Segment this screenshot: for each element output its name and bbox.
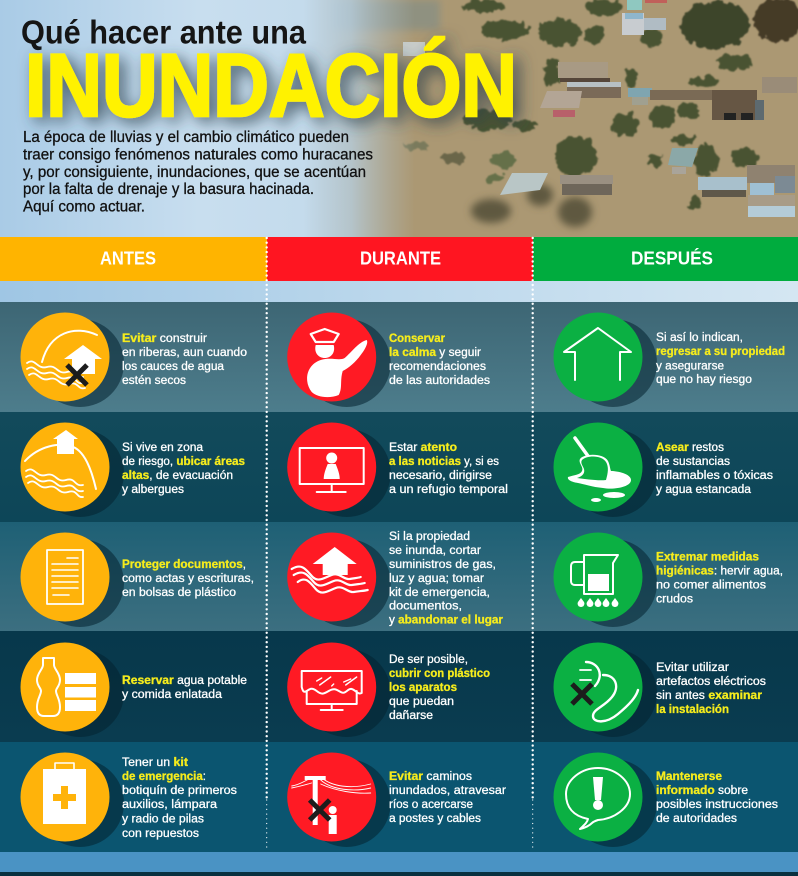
text: regresar a su propiedad: regresar a su propiedad [656, 344, 785, 358]
text: evitar caminos: ríos o acercarse [389, 797, 473, 811]
text: asear restos: de sustancias [656, 454, 730, 468]
text: evitar caminos: a postes y cables [389, 811, 481, 825]
text: asear restos [656, 440, 773, 496]
text: kit de emergencia: y radio de pilas [122, 812, 204, 826]
icon: water jug with drops [554, 532, 657, 627]
title line 2: INUNDACIÓN [25, 35, 517, 135]
text: mantenerse informado: informado sobre [656, 783, 748, 797]
text: ubicar áreas altas [122, 440, 245, 496]
text: evitar artefactos eléctricos: Evitar utilizar [656, 660, 729, 674]
text: mantenerse informado: de autoridades [656, 811, 737, 825]
text: si la propiedad se inunda [389, 529, 503, 626]
text: ubicar áreas altas: altas, de evacuación [122, 468, 233, 482]
panel: después [554, 312, 785, 847]
text: si la propiedad se inunda: se inunda, cortar [389, 543, 481, 557]
text: regresar a su propiedad: Si así lo indican, [656, 330, 743, 344]
text: evitar artefactos eléctricos: sin antes examinar [656, 688, 762, 702]
icon: house outline [554, 312, 657, 407]
text: regresar a su propiedad: y asegurarse [656, 358, 724, 372]
text: mantenerse informado: posibles instrucciones [656, 797, 778, 811]
text: si la propiedad se inunda: suministros de gas, [389, 557, 496, 571]
text: cubrir con plástico: De ser posible, [389, 652, 468, 666]
text: atento a las noticias: necesario, dirigirse [389, 468, 492, 482]
title [21, 14, 517, 135]
text: regresar a su propiedad [656, 330, 785, 386]
text: conservar la calma [389, 331, 490, 387]
text: cubrir con plástico: los aparatos [389, 680, 457, 694]
text: evitar artefactos eléctricos [656, 660, 766, 716]
text: kit de emergencia: con repuestos [122, 826, 199, 840]
icon: document [20, 532, 124, 627]
text: conservar la calma: de las autoridades [389, 373, 490, 387]
icon: police officer [287, 312, 391, 407]
intro paragraph: traer consigo fenómenos naturales como huracanes [23, 146, 373, 164]
icon: house by river crossed [20, 312, 124, 407]
text: kit de emergencia: de emergencia: [122, 769, 206, 783]
icon: power pole crossed [287, 752, 391, 847]
intro paragraph: por la falta de drenaje y la basura hacinada. [23, 181, 314, 198]
text: atento a las noticias: a las noticias y, si es [389, 454, 499, 468]
row background bands [0, 281, 798, 876]
icon: tv covered with plastic [287, 642, 391, 737]
text: evitar artefactos eléctricos: artefactos eléctricos [656, 674, 766, 688]
text: regresar a su propiedad: que no hay riesgo [656, 372, 752, 386]
text: extremar medidas higiénicas: no comer alimentos [656, 578, 766, 592]
text: si la propiedad se inunda: Si la propiedad [389, 529, 470, 543]
icon: house on hill [20, 422, 124, 517]
text: proteger documentos: Proteger documentos, [122, 557, 246, 571]
text: si la propiedad se inunda: luz y agua; tomar [389, 571, 484, 585]
icon: electric plug crossed [554, 642, 657, 737]
intro paragraph: y, por consiguiente, inundaciones, que se acentúan [23, 164, 366, 181]
text: atento a las noticias: Estar atento [389, 440, 457, 454]
text: kit de emergencia [122, 755, 237, 840]
text: cubrir con plástico: que puedan [389, 694, 454, 708]
text: extremar medidas higiénicas [656, 550, 783, 606]
text: conservar la calma: Conservar [389, 331, 445, 345]
text: proteger documentos: en bolsas de plástico [122, 585, 236, 599]
text: evitar caminos [389, 769, 506, 825]
text: kit de emergencia: Tener un kit [122, 755, 188, 769]
text: ubicar áreas altas: y albergues [122, 482, 184, 496]
text: evitar construir: Evitar construir [122, 331, 207, 345]
text: kit de emergencia: botiquín de primeros [122, 783, 237, 797]
text: atento a las noticias: a un refugio temporal [389, 482, 508, 496]
text: ubicar áreas altas: Si vive en zona [122, 440, 203, 454]
panel: antes [20, 312, 254, 847]
intro paragraph [23, 129, 373, 216]
column header: después: DESPUÉS [631, 248, 713, 268]
text: si la propiedad se inunda: y abandonar el lugar [389, 612, 503, 626]
text: extremar medidas higiénicas: Extremar medidas [656, 550, 759, 564]
text: si la propiedad se inunda: documentos, [389, 598, 462, 612]
text: conservar la calma: recomendaciones [389, 359, 486, 373]
text: evitar construir: en riberas, aun cuando [122, 345, 247, 359]
text: ubicar áreas altas: de riesgo, ubicar áreas [122, 454, 245, 468]
text: extremar medidas higiénicas: crudos [656, 592, 693, 606]
text: proteger documentos: como actas y escrituras, [122, 571, 254, 585]
column header: durante: DURANTE [360, 248, 441, 268]
text: reservar agua [122, 673, 247, 701]
text: cubrir con plástico: dañarse [389, 708, 433, 722]
column header: después [533, 237, 798, 281]
text: conservar la calma: la calma y seguir [389, 345, 481, 359]
text: evitar construir: los cauces de agua [122, 359, 224, 373]
text: extremar medidas higiénicas: higiénicas: hervir agua, [656, 564, 783, 578]
icon: emergency kit [20, 752, 124, 847]
header photo background: flooded village [0, 0, 798, 238]
text: si la propiedad se inunda: kit de emergencia, [389, 585, 490, 599]
column header: antes [0, 237, 267, 281]
text: evitar construir [122, 331, 247, 387]
text: asear restos: y agua estancada [656, 482, 751, 496]
text: reservar agua: y comida enlatada [122, 687, 222, 701]
text: cubrir con plástico: cubrir con plástico [389, 666, 490, 680]
column header: durante [267, 237, 533, 281]
icon: flooded house [287, 532, 391, 627]
text: kit de emergencia: auxilios, lámpara [122, 797, 217, 811]
icon: mop and spill [554, 422, 657, 517]
text: mantenerse informado [656, 769, 778, 825]
text: proteger documentos [122, 557, 254, 599]
text: mantenerse informado: Mantenerse [656, 769, 722, 783]
icon: speech bubble alert [554, 752, 657, 847]
text: asear restos: Asear restos [656, 440, 724, 454]
intro paragraph: La época de lluvias y el cambio climático pueden [23, 129, 349, 146]
title line 1: Qué hacer ante una [21, 14, 307, 50]
text: evitar artefactos eléctricos: la instalación [656, 702, 729, 716]
icon: water bottle and cans [20, 642, 124, 737]
text: evitar construir: estén secos [122, 373, 186, 387]
panel: durante [287, 312, 508, 847]
intro paragraph: Aquí como actuar. [23, 198, 145, 216]
text: evitar caminos: Evitar caminos [389, 769, 472, 783]
houses [403, 0, 797, 217]
text: reservar agua: Reservar agua potable [122, 673, 247, 687]
column header: antes: ANTES [100, 248, 156, 268]
icon: tv news [287, 422, 391, 517]
text: evitar caminos: inundados, atravesar [389, 783, 506, 797]
text: asear restos: inflamables o tóxicas [656, 468, 773, 482]
text: atento a las noticias [389, 440, 508, 496]
text: cubrir con plástico [389, 652, 490, 722]
